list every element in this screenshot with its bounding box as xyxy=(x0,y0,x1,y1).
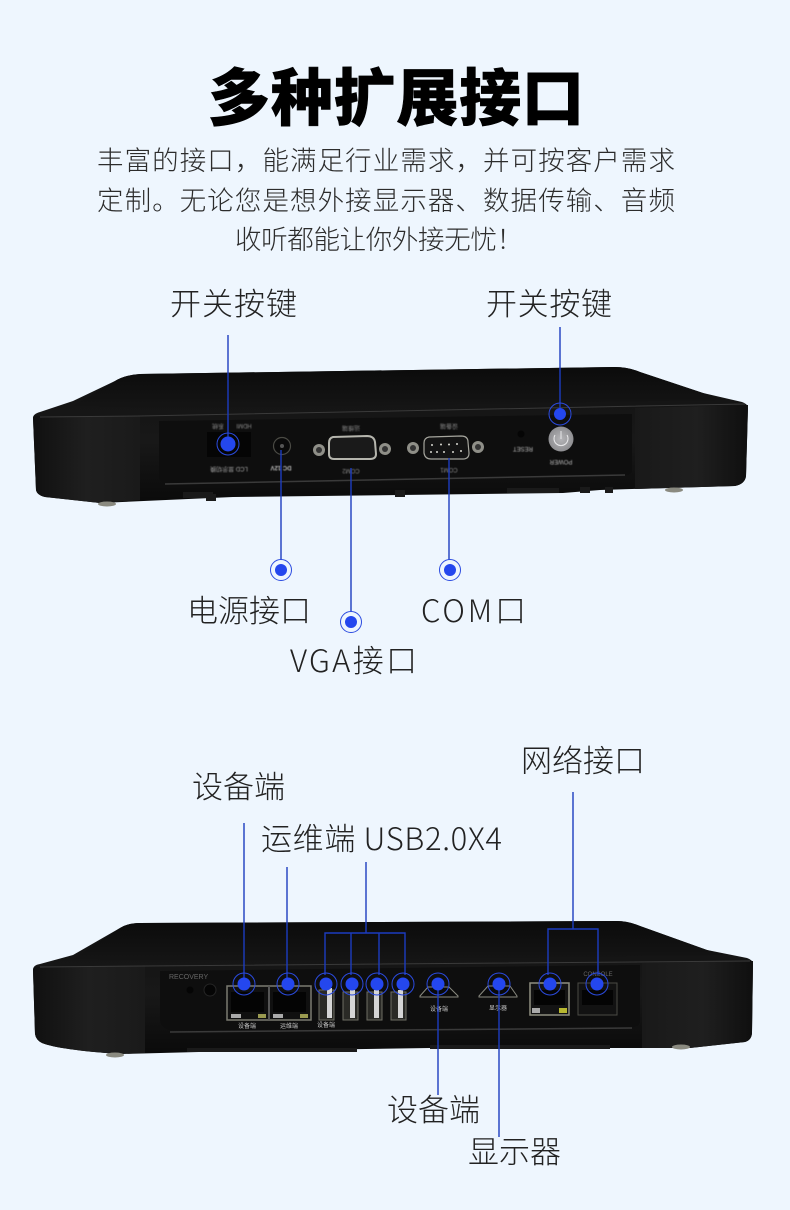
LAN port xyxy=(530,983,569,1015)
device: front panel with switch, power, VGA and COM ports: LCD 显示切换 xyxy=(210,465,248,473)
bottom feet xyxy=(187,1045,610,1052)
label: display HDMI: 显示器 xyxy=(468,1127,561,1172)
port recess xyxy=(159,414,632,484)
label: switch left: 开关按键 xyxy=(170,279,297,324)
reset hole xyxy=(518,430,524,438)
label: switch right: 开关按键 xyxy=(486,279,612,324)
top surface xyxy=(73,921,725,962)
title: 多种扩展接口 xyxy=(208,48,584,138)
USB ports xyxy=(319,988,406,1020)
power button xyxy=(548,426,574,452)
left corner block xyxy=(33,966,145,1054)
port captions: CONSOLE xyxy=(583,972,613,978)
label: power port: 电源接口 xyxy=(187,586,311,631)
label: COM port: COM口 xyxy=(421,586,526,631)
label: network: 网络接口 xyxy=(521,736,645,781)
port captions: 设备端 xyxy=(317,1021,335,1029)
intro text: 收听都能让你外接无忧！ xyxy=(235,218,523,257)
port captions: 设备端 xyxy=(238,1022,256,1030)
right corner block xyxy=(642,961,753,1048)
HDMI ports xyxy=(420,986,517,997)
marker: power xyxy=(549,403,571,425)
port captions: 显示器 xyxy=(489,1005,507,1012)
recovery label and holes: RECOVERY xyxy=(169,974,208,981)
VGA port xyxy=(313,436,391,459)
bottom feet xyxy=(183,487,613,501)
marker: power port xyxy=(270,560,292,580)
label: device HDMI: 设备端 xyxy=(387,1085,480,1130)
port captions xyxy=(238,972,613,1030)
right corner block xyxy=(635,405,748,489)
top surface xyxy=(73,367,725,409)
device: front panel with switch, power, VGA and COM ports xyxy=(33,367,748,506)
leader lines: rear panel xyxy=(244,792,598,1137)
switch xyxy=(207,432,251,457)
device: front panel with switch, power, VGA and COM ports: 设备端 xyxy=(440,422,458,430)
device: front panel with switch, power, VGA and COM ports: COM1 xyxy=(440,466,458,472)
port recess xyxy=(160,965,640,1030)
device: front panel with switch, power, VGA and COM ports: DC 12V xyxy=(270,464,292,470)
label: VGA port: VGA接口 xyxy=(290,636,417,681)
intro text xyxy=(97,139,675,257)
label: device port: 设备端 xyxy=(192,762,285,807)
marker: VGA xyxy=(340,612,362,632)
port captions: 设备端 xyxy=(430,1005,448,1013)
console port xyxy=(578,983,617,1015)
device: front panel with switch, power, VGA and COM ports: 系统 xyxy=(212,422,224,430)
COM port xyxy=(407,436,484,459)
intro text: 丰富的接口，能满足行业需求，并可按客户需求 xyxy=(97,139,675,178)
device: front panel with switch, power, VGA and COM ports: COM2 xyxy=(342,467,360,473)
device body xyxy=(33,921,753,1054)
device: rear panel with LAN, USB and HDMI ports xyxy=(33,921,753,1058)
markers: rear panel ports xyxy=(233,973,608,995)
left corner block xyxy=(33,415,140,503)
device: front panel with switch, power, VGA and COM ports: HDMI xyxy=(236,422,252,428)
intro text: 定制。无论您是想外接显示器、数据传输、音频 xyxy=(97,179,675,218)
device: front panel with switch, power, VGA and COM ports: 运维端 xyxy=(342,424,360,432)
device: front panel with switch, power, VGA and COM ports: POWER xyxy=(549,458,572,464)
marker: switch xyxy=(217,433,239,455)
dual LAN ports xyxy=(227,986,311,1020)
device body xyxy=(33,367,748,503)
leader lines: front panel xyxy=(228,327,560,612)
label: maintenance USB: 运维端 USB2.0X4 xyxy=(261,814,502,859)
marker: COM xyxy=(440,560,460,580)
device: front panel with switch, power, VGA and COM ports: RESET xyxy=(513,445,533,451)
port captions: 运维端 xyxy=(280,1022,298,1030)
DC jack xyxy=(274,438,290,454)
